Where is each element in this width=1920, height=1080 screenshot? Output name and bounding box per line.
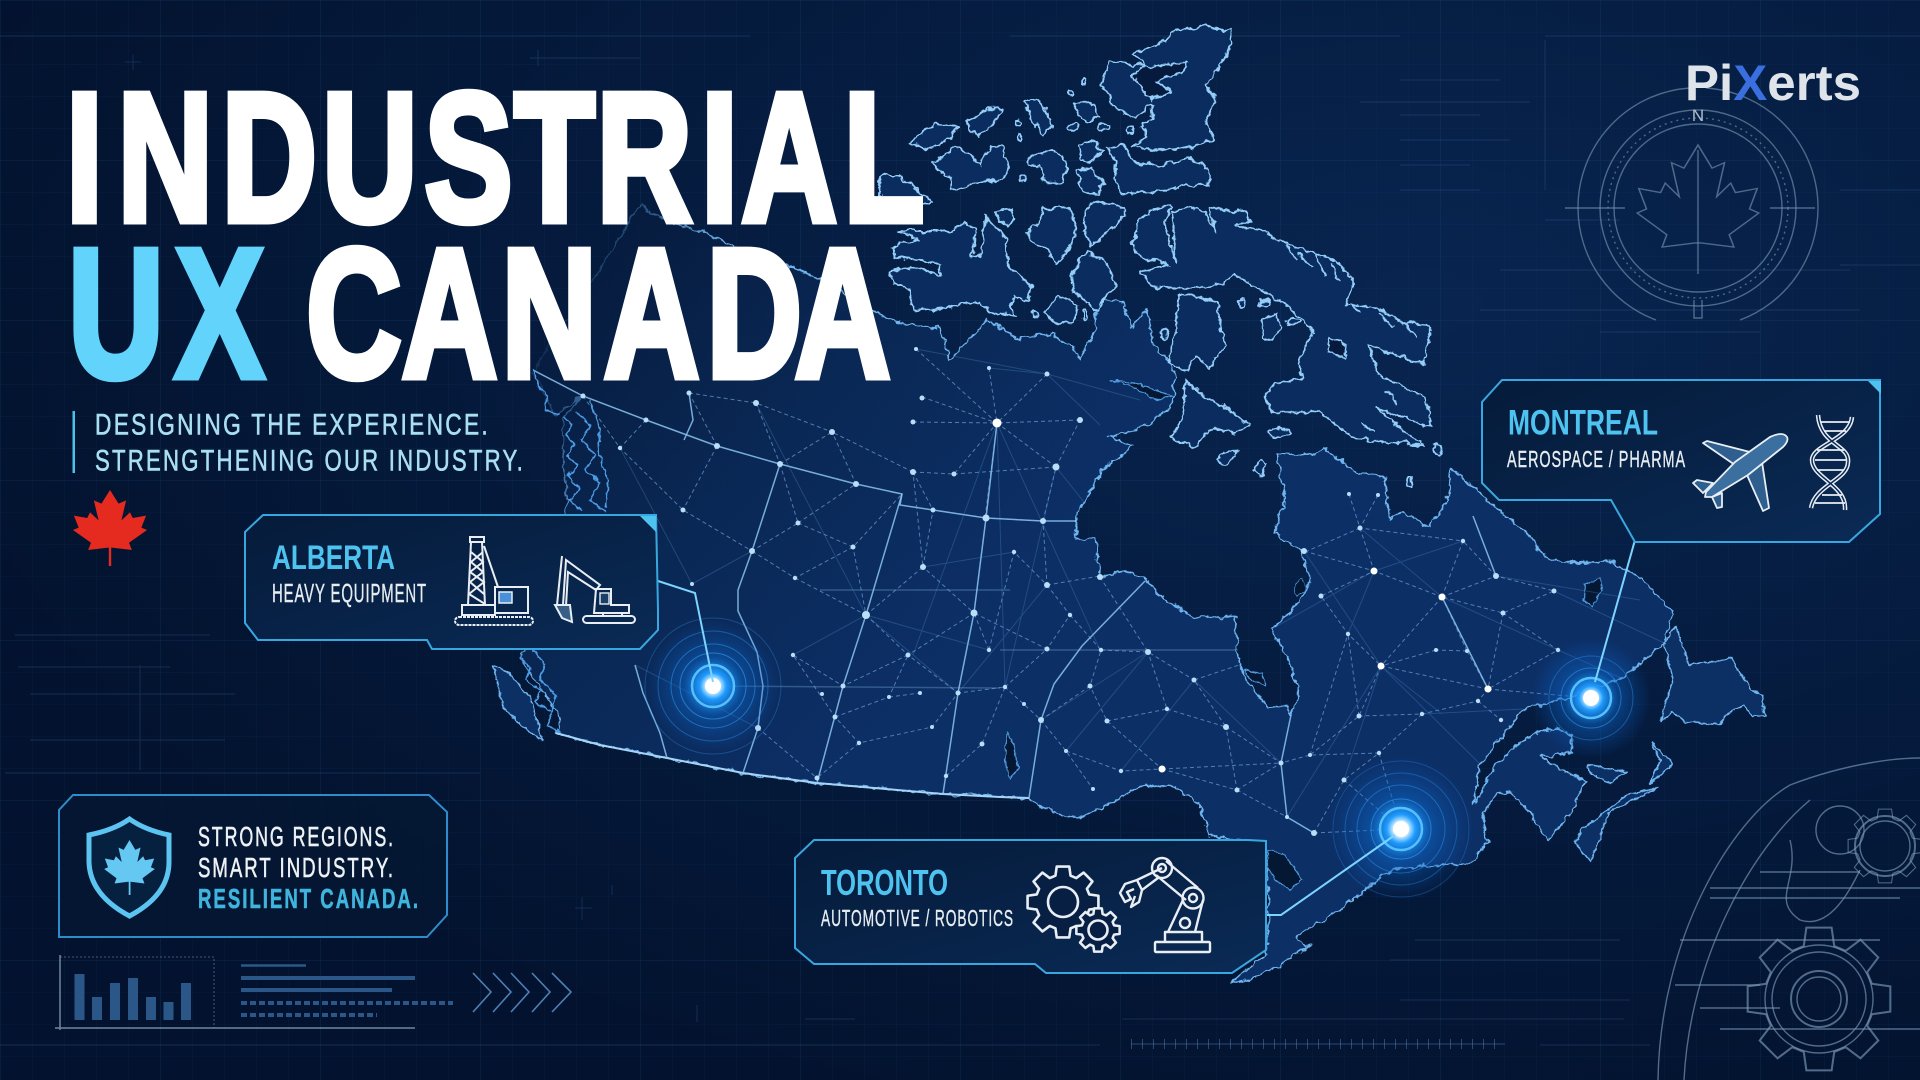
city name: TORONTO	[821, 862, 948, 903]
subtitle: STRENGTHENING OUR INDUSTRY.	[95, 444, 525, 478]
icon: red maple leaf	[73, 490, 147, 566]
marker: Alberta	[645, 618, 781, 754]
title: INDUSTRIAL	[66, 55, 924, 260]
marker: Montreal	[1531, 638, 1651, 758]
blueprint gears lower right	[1658, 758, 1920, 1080]
province boundaries	[533, 370, 1496, 833]
decorative data lines	[241, 966, 453, 1015]
statement text: RESILIENT CANADA.	[198, 883, 420, 914]
icon: robot arm	[1120, 858, 1210, 952]
network edges	[583, 349, 1590, 833]
icon: shield with maple leaf	[89, 819, 169, 916]
icon: DNA helix	[1811, 415, 1852, 510]
subtitle: DESIGNING THE EXPERIENCE.	[95, 408, 490, 442]
panel: Alberta	[245, 515, 658, 649]
arctic islands	[880, 26, 1442, 486]
title: UX	[68, 211, 264, 416]
panel: Montreal	[1482, 380, 1881, 542]
decorative chevrons	[473, 973, 571, 1012]
compass north label: N	[1692, 106, 1704, 125]
title: CANADA	[306, 211, 890, 416]
icon: drilling rig	[455, 537, 533, 625]
statement text: STRONG REGIONS.	[198, 821, 395, 852]
southern border highlight	[556, 733, 1029, 798]
Newfoundland and Maritimes	[493, 626, 1765, 862]
panel: Toronto	[795, 840, 1266, 973]
city name: ALBERTA	[272, 539, 395, 577]
decorative bar chart	[55, 955, 415, 1030]
sector label: AUTOMOTIVE / ROBOTICS	[821, 905, 1014, 931]
network nodes	[580, 347, 1560, 836]
sector label: HEAVY EQUIPMENT	[272, 578, 427, 608]
icon: excavator	[555, 556, 635, 623]
leader lines and location markers	[645, 501, 1651, 915]
lakes and inland water	[1005, 380, 1602, 890]
compass with maple leaf	[1565, 88, 1818, 320]
statement text	[198, 821, 420, 914]
panel: strong regions statement	[59, 795, 447, 937]
logo: PiXerts	[1685, 55, 1861, 111]
title	[66, 55, 924, 416]
mainland landmass	[520, 205, 1673, 983]
statement text: SMART INDUSTRY.	[198, 852, 395, 883]
marker: Toronto	[1329, 757, 1473, 901]
icon: airplane	[1693, 434, 1788, 511]
sector label: AEROSPACE / PHARMA	[1507, 446, 1686, 472]
British Columbia coast	[520, 370, 608, 732]
subtitle	[72, 408, 525, 478]
city name: MONTREAL	[1508, 404, 1658, 442]
secondary fine web	[620, 349, 1664, 817]
leader lines	[658, 501, 1646, 915]
Canada map	[493, 26, 1765, 983]
icon: gears	[1028, 867, 1120, 952]
